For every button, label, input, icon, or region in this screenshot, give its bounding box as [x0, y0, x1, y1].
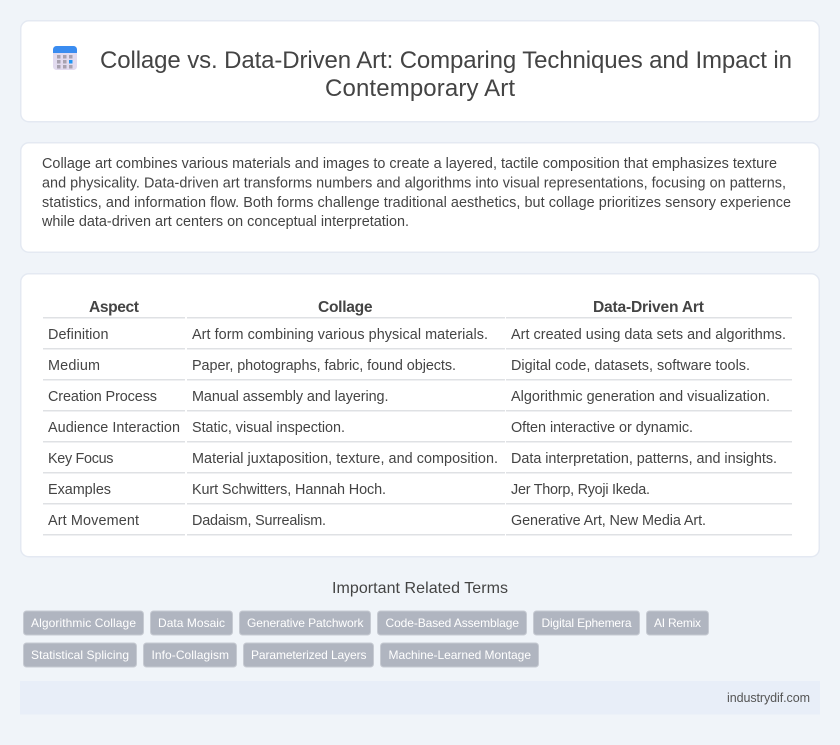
- row: definition: Definition: [48, 327, 108, 343]
- panel: title: [21, 21, 819, 122]
- panel: comparison table: [21, 274, 819, 557]
- tag: Code-Based Assemblage: [386, 616, 519, 630]
- row: medium: Paper, photographs, fabric, found objects.: [192, 358, 456, 374]
- tag: Parameterized Layers: [251, 648, 366, 662]
- footer: [20, 681, 820, 714]
- title text: [100, 47, 792, 102]
- row: art movement: Generative Art, New Media Art.: [511, 513, 706, 529]
- row: key focus: Key Focus: [48, 451, 114, 467]
- footer: industrydif.com: [727, 691, 810, 705]
- tags: related terms: [24, 611, 708, 667]
- row: audience interaction: Static, visual inspection.: [192, 420, 345, 436]
- row: examples: Examples: [48, 482, 111, 498]
- title text: Contemporary Art: [325, 75, 515, 102]
- row: art movement: [48, 513, 706, 529]
- row: key focus: [48, 451, 777, 467]
- row: key focus: Material juxtaposition, texture, and composition.: [192, 451, 498, 467]
- table header: Collage: [318, 299, 373, 316]
- tag: [150, 611, 232, 635]
- tag: Statistical Splicing: [31, 648, 129, 662]
- tag: Machine-Learned Montage: [388, 648, 531, 662]
- row: definition: Art created using data sets and algorithms.: [511, 327, 786, 343]
- introduction text: Collage art combines various materials and images to create a layered, tactile composition that emphasizes texture: [42, 156, 777, 172]
- tag: Generative Patchwork: [247, 616, 364, 630]
- table header: Data-Driven Art: [593, 299, 704, 316]
- table header: Aspect: [89, 299, 139, 316]
- row: creation process: Manual assembly and layering.: [192, 389, 388, 405]
- heading: related terms: Important Related Terms: [332, 580, 508, 597]
- tag: AI Remix: [654, 616, 701, 630]
- row: medium: [48, 358, 750, 374]
- tag: Data Mosaic: [158, 616, 225, 630]
- icon: calendar: [53, 46, 77, 70]
- tag: [380, 643, 538, 667]
- tag: Digital Ephemera: [542, 616, 632, 630]
- row: examples: Jer Thorp, Ryoji Ikeda.: [511, 482, 650, 498]
- row: examples: Kurt Schwitters, Hannah Hoch.: [192, 482, 386, 498]
- tag: Algorithmic Collage: [31, 616, 136, 630]
- row: creation process: Creation Process: [48, 389, 157, 405]
- introduction text: while data-driven art centers on conceptual interpretation.: [41, 214, 409, 230]
- tag: [378, 611, 526, 635]
- row: medium: Medium: [48, 358, 100, 374]
- row: definition: Art form combining various physical materials.: [192, 327, 488, 343]
- row: medium: Digital code, datasets, software tools.: [511, 358, 750, 374]
- introduction text: statistics, and information flow. Both forms challenge traditional aesthetics, but collage prioritizes sensory experience: [42, 195, 791, 211]
- tag: [144, 643, 236, 667]
- row: definition: [48, 327, 786, 343]
- tag: [24, 611, 144, 635]
- tag: [244, 643, 374, 667]
- row: art movement: Art Movement: [48, 513, 139, 529]
- tag: Info-Collagism: [152, 648, 229, 662]
- tag: [24, 643, 136, 667]
- title text: Collage vs. Data-Driven Art: Comparing Techniques and Impact in: [100, 47, 792, 74]
- tag: [534, 611, 640, 635]
- row: art movement: Dadaism, Surrealism.: [192, 513, 326, 529]
- introduction text: and physicality. Data-driven art transforms numbers and algorithms into visual representations, focusing on patterns,: [42, 175, 786, 191]
- row: audience interaction: Often interactive or dynamic.: [511, 420, 693, 436]
- panel: introduction: [21, 143, 819, 252]
- tag: [646, 611, 708, 635]
- table header: [89, 299, 704, 316]
- row: creation process: Algorithmic generation and visualization.: [511, 389, 770, 405]
- introduction text: [41, 156, 791, 230]
- row: key focus: Data interpretation, patterns, and insights.: [511, 451, 777, 467]
- row: audience interaction: [48, 420, 693, 436]
- row: examples: [48, 482, 650, 498]
- row: audience interaction: Audience Interaction: [48, 420, 180, 436]
- row: creation process: [48, 389, 770, 405]
- tag: [240, 611, 370, 635]
